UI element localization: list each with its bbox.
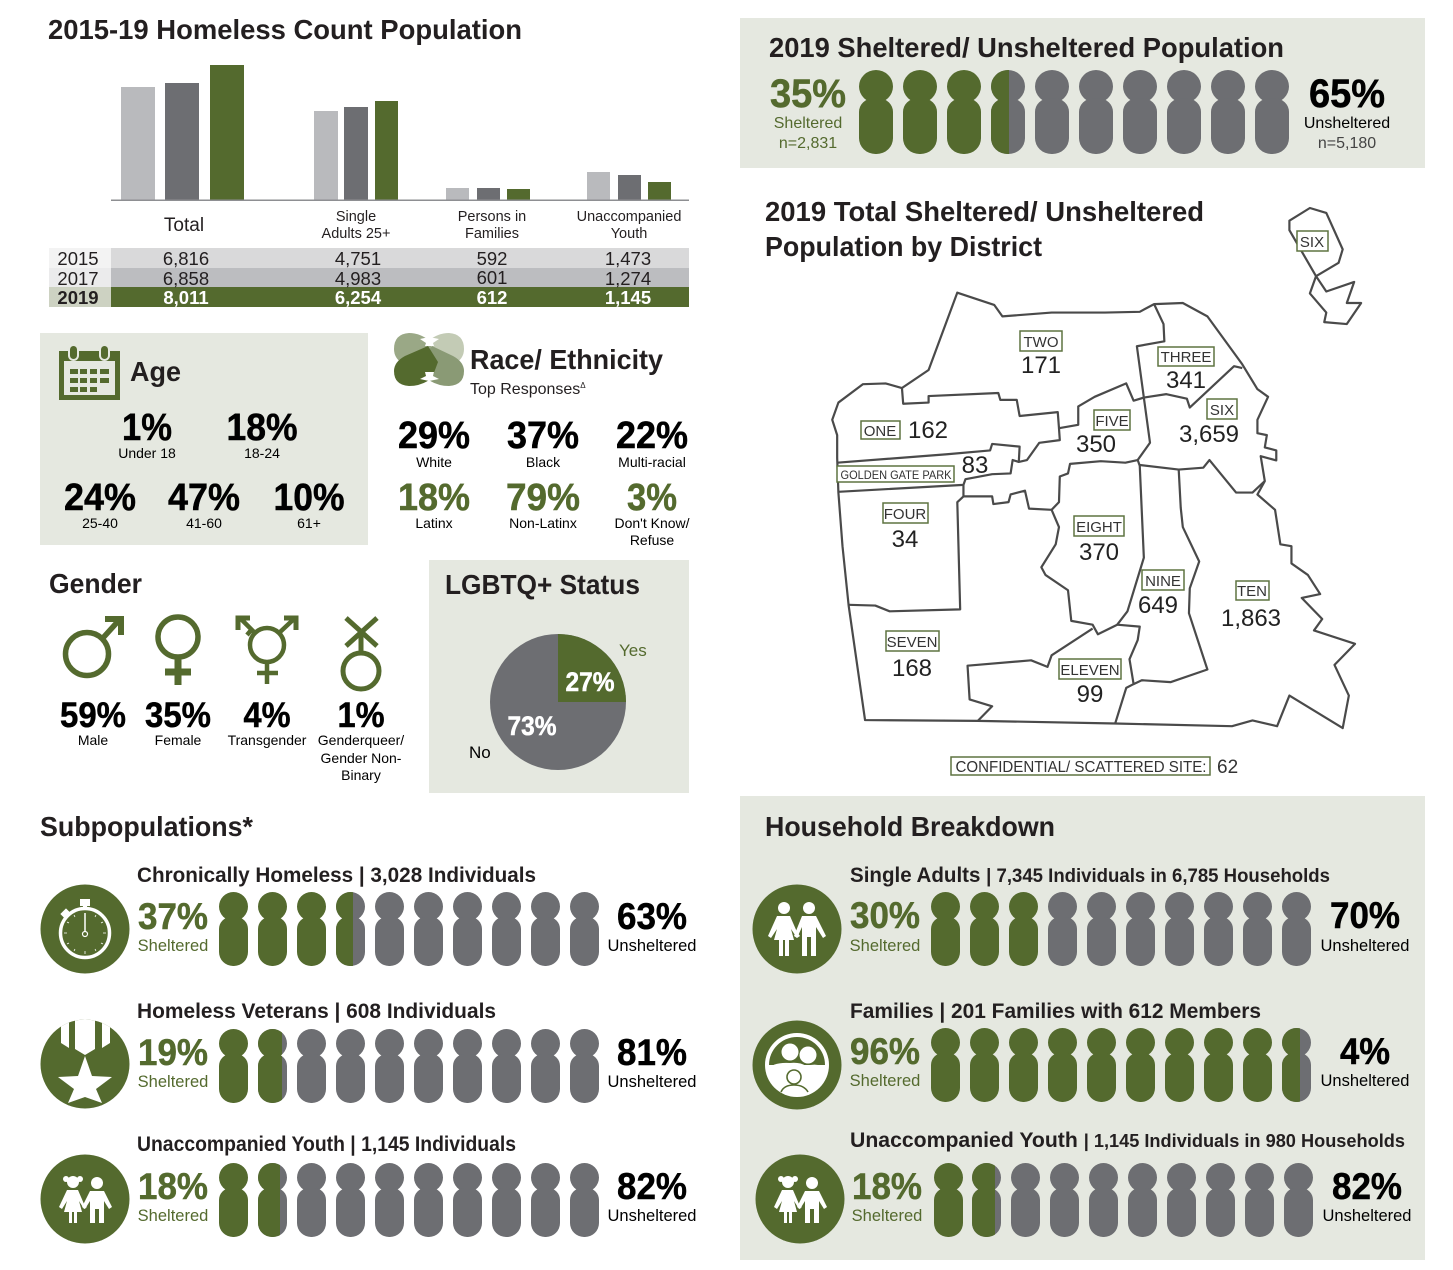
icon: male — [66, 618, 121, 676]
title: 2019 Sheltered/ Unsheltered Population — [769, 32, 1284, 63]
confidential site callout: CONFIDENTIAL/ SCATTERED SITE: — [956, 759, 1206, 776]
sheltered stat: 96% — [850, 1031, 920, 1072]
sheltered stat — [138, 896, 208, 955]
data table: 612 — [477, 287, 507, 308]
gender stats: Female — [155, 732, 202, 748]
person pictogram row — [934, 1163, 1313, 1237]
subheading: Families | 201 Families with 612 Members — [850, 1000, 1261, 1023]
data table: 1,473 — [605, 248, 651, 269]
gender stats: 35% — [145, 696, 211, 735]
unsheltered stat: 63% — [617, 896, 687, 937]
district labels: 350 — [1076, 431, 1116, 458]
pie chart: 27% — [566, 667, 614, 697]
row: single adults — [752, 864, 1409, 974]
age stats: 1% — [122, 407, 172, 449]
district labels: NINE — [1145, 573, 1181, 590]
district labels: 341 — [1166, 367, 1206, 394]
pie labels: Yes — [619, 641, 647, 660]
unsheltered stat: Unsheltered — [1304, 115, 1390, 132]
race stats — [398, 415, 690, 548]
icon: stopwatch — [40, 884, 130, 974]
category labels: Persons in — [458, 209, 526, 225]
heading: Household Breakdown — [765, 811, 1055, 842]
district labels: EIGHT — [1076, 519, 1122, 536]
panel: subpopulations — [40, 811, 696, 1244]
unsheltered stat: 65% — [1309, 72, 1385, 116]
unsheltered stat: Unsheltered — [1323, 1207, 1411, 1225]
unsheltered stat — [1323, 1166, 1411, 1225]
heading: Subpopulations* — [40, 811, 253, 842]
race stats: Black — [526, 454, 561, 470]
unsheltered stat: n=5,180 — [1318, 135, 1376, 152]
unsheltered stat: 82% — [1332, 1166, 1402, 1207]
data table: 592 — [477, 248, 507, 269]
subheading: Homeless Veterans | 608 Individuals — [137, 1000, 496, 1023]
district labels: SIX — [1210, 402, 1234, 419]
district labels: 83 — [962, 452, 988, 479]
district labels: 162 — [908, 417, 948, 444]
person pictogram row — [219, 1029, 599, 1103]
age stats: 25-40 — [82, 515, 118, 531]
district labels: 649 — [1138, 592, 1178, 619]
sheltered stat — [852, 1166, 922, 1225]
icon: children — [756, 1154, 844, 1244]
race stats: 18% — [398, 477, 470, 519]
unsheltered stat: 82% — [617, 1166, 687, 1207]
sheltered stat: 35% — [770, 72, 846, 116]
age stats: Under 18 — [118, 445, 176, 461]
district labels: GOLDEN GATE PARK — [840, 468, 952, 482]
district labels: 168 — [892, 655, 932, 682]
unsheltered stat: 70% — [1330, 895, 1400, 936]
bar chart — [111, 65, 689, 201]
data table: 601 — [477, 267, 507, 288]
data table: 2017 — [57, 268, 99, 289]
person pictogram row — [219, 892, 599, 966]
panel: household breakdown — [740, 796, 1425, 1260]
gender stats: 4% — [244, 696, 290, 735]
category labels: Families — [465, 226, 519, 242]
unsheltered stat: Unsheltered — [1321, 937, 1409, 955]
unsheltered stat: 4% — [1340, 1031, 1390, 1072]
category labels: Total — [164, 215, 204, 236]
sheltered stat: 19% — [138, 1032, 208, 1073]
person pictogram row — [219, 1163, 599, 1237]
subheading: Single Adults | 7,345 Individuals in 6,785 Households — [850, 864, 1330, 887]
icon: family — [752, 1020, 842, 1110]
icon: medal — [40, 1015, 130, 1108]
pie chart — [490, 634, 626, 770]
data table: 2019 — [57, 287, 99, 308]
icon: transgender — [238, 618, 296, 684]
age stats: 18-24 — [244, 445, 280, 461]
gender stats — [60, 696, 404, 783]
panel: homeless count population — [48, 14, 689, 308]
title — [765, 196, 1204, 262]
data table: 4,751 — [335, 248, 381, 269]
heading: Race/ Ethnicity — [470, 344, 663, 375]
district labels: THREE — [1161, 349, 1211, 366]
district labels: ONE — [864, 423, 896, 440]
panel: LGBTQ+ status — [429, 560, 689, 793]
title: 2019 Total Sheltered/ Unsheltered — [765, 196, 1204, 227]
data table: 6,254 — [335, 287, 382, 308]
unsheltered stat — [1321, 1031, 1409, 1090]
pie chart: 73% — [508, 711, 556, 741]
data table: 6,816 — [163, 248, 209, 269]
gender stats: Transgender — [228, 732, 307, 748]
sheltered stat — [138, 1166, 208, 1225]
race stats: 29% — [398, 415, 470, 457]
data table: 4,983 — [335, 268, 381, 289]
row: chronically homeless — [40, 864, 696, 974]
race stats: White — [416, 454, 452, 470]
data table: 6,858 — [163, 268, 209, 289]
sheltered stat: 18% — [138, 1166, 208, 1207]
district labels: 171 — [1021, 352, 1061, 379]
category labels: Single — [336, 209, 376, 225]
age stats: 61+ — [297, 515, 321, 531]
sheltered stat: 18% — [852, 1166, 922, 1207]
panel: sheltered / unsheltered population — [740, 18, 1425, 168]
icon: hands — [394, 333, 464, 386]
age stats — [64, 407, 344, 531]
subheading: Δ — [580, 381, 586, 390]
district labels: TWO — [1024, 334, 1058, 351]
data table: 2015 — [57, 248, 99, 269]
gender stats: 59% — [60, 696, 126, 735]
gender stats: Binary — [341, 767, 381, 783]
age stats: 47% — [168, 477, 240, 519]
subheading: Unaccompanied Youth | 1,145 Individuals — [137, 1133, 516, 1156]
data table: 1,145 — [605, 287, 651, 308]
race stats: Multi-racial — [618, 454, 686, 470]
race stats: 3% — [627, 477, 677, 519]
subheading: Unaccompanied Youth | 1,145 Individuals in 980 Households — [850, 1129, 1405, 1152]
unsheltered stat: Unsheltered — [608, 937, 696, 955]
category labels — [164, 209, 681, 242]
unsheltered stat: 81% — [617, 1032, 687, 1073]
panel: gender — [49, 568, 404, 783]
panel: age — [40, 333, 368, 545]
age stats: 41-60 — [186, 515, 222, 531]
row: unaccompanied youth — [40, 1133, 696, 1244]
sheltered stat: 30% — [850, 895, 920, 936]
unsheltered stat — [608, 1032, 696, 1091]
sheltered stat — [770, 72, 846, 152]
unsheltered stat — [608, 1166, 696, 1225]
district labels: 370 — [1079, 539, 1119, 566]
sheltered stat: Sheltered — [852, 1207, 922, 1225]
sheltered stat — [138, 1032, 208, 1091]
district labels: TEN — [1237, 583, 1267, 600]
age stats: 18% — [226, 407, 298, 449]
unsheltered stat: Unsheltered — [608, 1073, 696, 1091]
icon: non-binary — [343, 618, 379, 689]
district labels: 34 — [892, 526, 918, 553]
panel: race and ethnicity — [394, 333, 690, 548]
pie labels: No — [469, 743, 491, 762]
gender stats: 1% — [338, 696, 384, 735]
category labels: Adults 25+ — [322, 226, 390, 242]
person pictogram row — [859, 70, 1289, 154]
sheltered stat — [850, 1031, 920, 1090]
sheltered stat: Sheltered — [138, 1207, 208, 1225]
district labels: FOUR — [884, 506, 926, 523]
district labels: SIX — [1300, 234, 1324, 251]
race stats: Latinx — [415, 515, 453, 531]
icon: calendar — [59, 345, 120, 400]
panel: population by district map — [765, 196, 1361, 778]
category labels: Youth — [611, 226, 647, 242]
sheltered stat — [850, 895, 920, 955]
heading: LGBTQ+ Status — [445, 569, 640, 600]
title: Population by District — [765, 231, 1042, 262]
sheltered stat: Sheltered — [850, 937, 920, 955]
sheltered stat: Sheltered — [138, 1073, 208, 1091]
title: 2015-19 Homeless Count Population — [48, 14, 522, 45]
race stats: Refuse — [630, 532, 674, 548]
unsheltered stat — [1304, 72, 1390, 152]
district labels: ELEVEN — [1060, 662, 1120, 679]
person pictogram row — [931, 892, 1311, 966]
map — [832, 208, 1361, 728]
race stats: 37% — [507, 415, 579, 457]
pie labels — [469, 641, 647, 762]
row: homeless veterans — [40, 1000, 696, 1108]
row: unaccompanied youth households — [756, 1129, 1411, 1244]
gender stats: Gender Non- — [321, 750, 402, 766]
data table: 8,011 — [163, 287, 209, 308]
person pictogram row — [931, 1028, 1311, 1102]
race stats: Non-Latinx — [509, 515, 577, 531]
icon: children — [40, 1154, 130, 1244]
sheltered stat: 37% — [138, 896, 208, 937]
sheltered stat: n=2,831 — [779, 135, 837, 152]
race stats: Don't Know/ — [614, 515, 690, 531]
confidential site callout: 62 — [1217, 757, 1238, 778]
gender stats: Genderqueer/ — [318, 732, 404, 748]
race stats: 22% — [616, 415, 688, 457]
category labels: Unaccompanied — [577, 209, 681, 225]
data table — [49, 248, 689, 308]
unsheltered stat — [1321, 895, 1409, 955]
unsheltered stat: Unsheltered — [1321, 1072, 1409, 1090]
subheading: Top Responses — [470, 381, 580, 398]
unsheltered stat: Unsheltered — [608, 1207, 696, 1225]
district labels: 99 — [1077, 681, 1103, 708]
data table: 1,274 — [605, 268, 651, 289]
district labels: SEVEN — [887, 634, 937, 651]
icon: adults — [752, 884, 842, 974]
unsheltered stat — [608, 896, 696, 955]
heading: Gender — [49, 568, 142, 599]
sheltered stat: Sheltered — [774, 115, 842, 132]
race stats: 79% — [506, 477, 580, 519]
sheltered stat: Sheltered — [850, 1072, 920, 1090]
icon: female — [158, 617, 198, 685]
district labels: 1,863 — [1221, 605, 1281, 632]
subheading: Chronically Homeless | 3,028 Individuals — [137, 864, 536, 887]
district labels: FIVE — [1095, 413, 1129, 430]
gender stats: Male — [78, 732, 108, 748]
heading: Age — [130, 356, 181, 387]
row: families — [752, 1000, 1409, 1110]
age stats: 24% — [64, 477, 136, 519]
district labels — [837, 231, 1328, 708]
sheltered stat: Sheltered — [138, 937, 208, 955]
district labels: 3,659 — [1179, 421, 1239, 448]
age stats: 10% — [274, 477, 344, 519]
